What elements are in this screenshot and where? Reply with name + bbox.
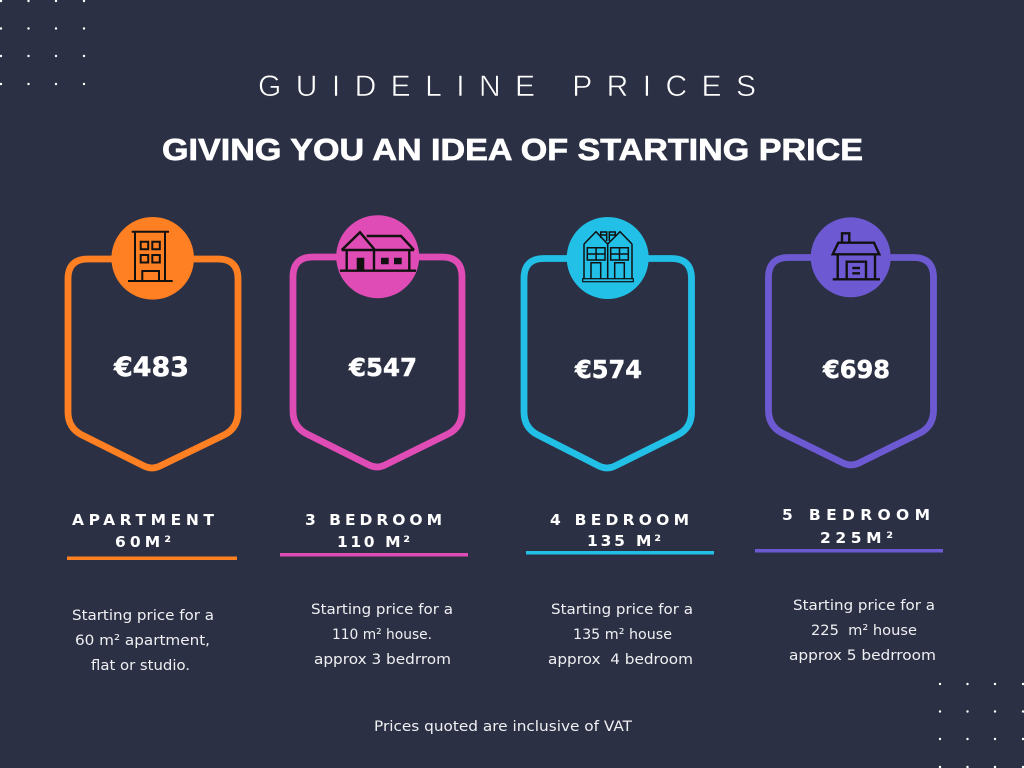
price: 4 bedroom: €574 <box>574 355 642 384</box>
label: 5 bedroom: 225M² <box>820 529 893 547</box>
icon: 4 bedroom terraced house <box>567 217 649 299</box>
label: 4 bedroom: 135 M² <box>587 532 661 550</box>
description: 3 bedroom: 110 m² house. <box>332 627 432 643</box>
price: apartment: €483 <box>113 352 189 383</box>
label: 5 bedroom: 5 BEDROOM <box>782 506 930 524</box>
description: 5 bedroom: Starting price for a <box>793 598 935 614</box>
panel: apartment <box>67 217 238 674</box>
panel: 3 bedroom <box>280 215 468 668</box>
description: 3 bedroom: Starting price for a <box>311 602 453 618</box>
badge outline: 4 bedroom <box>524 258 692 468</box>
label: 4 bedroom: 4 BEDROOM <box>550 511 689 529</box>
price: 5 bedroom: €698 <box>822 355 890 384</box>
description: apartment: 60 m² apartment, <box>75 633 210 649</box>
description: 3 bedroom: approx 3 bedrrom <box>314 652 451 668</box>
description: 3 bedroom <box>311 602 453 668</box>
description: apartment: flat or studio. <box>91 658 190 674</box>
description: apartment <box>72 608 214 674</box>
label: 3 bedroom: 110 M² <box>337 533 410 551</box>
description: 5 bedroom: 225 m² house <box>811 623 917 639</box>
label: 5 bedroom <box>755 506 943 552</box>
label: 3 bedroom <box>280 511 468 556</box>
title: GUIDELINE PRICES <box>258 70 756 103</box>
description: 4 bedroom <box>548 602 693 668</box>
badge outline: 3 bedroom <box>293 257 462 467</box>
description: 4 bedroom: Starting price for a <box>551 602 693 618</box>
label: 4 bedroom <box>526 511 714 554</box>
label: 3 bedroom: 3 BEDROOM <box>305 511 442 529</box>
icon: apartment building <box>111 217 194 300</box>
description: 5 bedroom: approx 5 bedrroom <box>789 648 936 664</box>
icon: 5 bedroom house <box>811 217 891 297</box>
subtitle: GIVING YOU AN IDEA OF STARTING PRICE <box>162 132 863 167</box>
description: apartment: Starting price for a <box>72 608 214 624</box>
panel: 5 bedroom <box>755 217 943 664</box>
panel: 4 bedroom <box>524 217 714 668</box>
icon: 3 bedroom house <box>336 215 419 298</box>
footnote: Prices quoted are inclusive of VAT <box>374 719 632 735</box>
description: 5 bedroom <box>789 598 936 664</box>
badge outline: apartment <box>68 259 238 468</box>
label: apartment <box>67 511 237 560</box>
label: apartment: APARTMENT <box>72 511 214 529</box>
description: 4 bedroom: 135 m² house <box>573 627 672 643</box>
description: 4 bedroom: approx 4 bedroom <box>548 652 693 668</box>
badge outline: 5 bedroom <box>768 258 934 465</box>
price: 3 bedroom: €547 <box>348 353 417 382</box>
label: apartment: 60M² <box>115 533 171 551</box>
